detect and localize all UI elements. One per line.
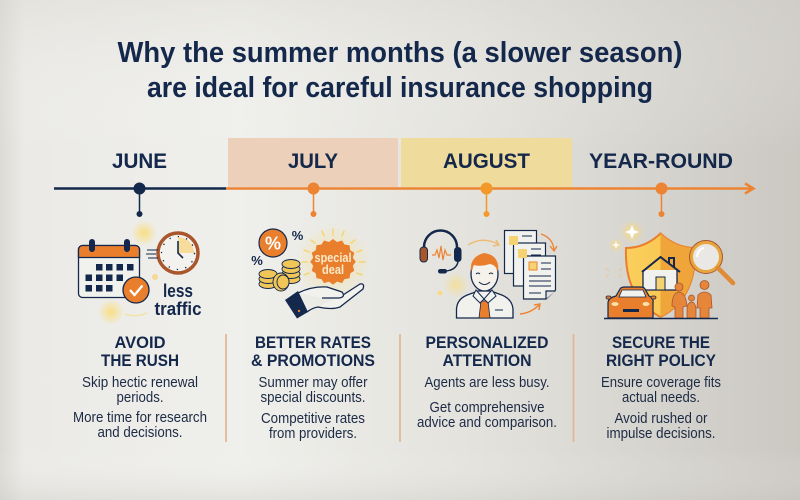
title: Why the summer months (a slower season) — [118, 37, 682, 69]
text column: better rates and promotions: Summer may offer — [258, 374, 368, 391]
icon: calendar, clock and less traffic: traffic — [154, 299, 202, 319]
text column: better rates and promotions: Competitive rates — [261, 410, 365, 427]
icon: calendar, clock and less traffic: less — [163, 281, 193, 301]
label: July: JULY — [288, 149, 338, 173]
text column: better rates and promotions: special discounts. — [260, 389, 366, 406]
text column: secure the right policy: actual needs. — [622, 389, 700, 406]
divider lines between columns — [226, 334, 574, 442]
text column: personalized attention — [417, 334, 557, 431]
band: July — [228, 138, 398, 187]
text column: avoid the rush — [73, 334, 207, 441]
text column: avoid the rush: and decisions. — [98, 424, 182, 441]
text column: better rates and promotions: BETTER RATES — [255, 334, 371, 352]
text column: secure the right policy: impulse decisions. — [606, 425, 716, 442]
band: August — [401, 138, 572, 187]
icon: special deal, coins and hand: % — [251, 253, 263, 268]
text column: better rates and promotions — [251, 334, 375, 442]
text column: better rates and promotions: from providers. — [269, 425, 357, 442]
marker: July — [308, 183, 319, 216]
label: Year-round: YEAR-ROUND — [589, 149, 733, 173]
title: are ideal for careful insurance shopping — [147, 72, 653, 104]
text column: avoid the rush: Skip hectic renewal — [82, 374, 198, 391]
label: June: JUNE — [112, 149, 167, 173]
icon: special deal, coins and hand: deal — [322, 262, 344, 277]
text column: personalized attention: Get comprehensive — [430, 399, 544, 416]
text column: secure the right policy: SECURE THE — [612, 334, 710, 352]
text column: secure the right policy: RIGHT POLICY — [606, 352, 716, 370]
text column: personalized attention: Agents are less busy. — [424, 374, 550, 391]
text column: personalized attention: advice and comparison. — [417, 414, 557, 431]
timeline — [54, 138, 754, 216]
text column: avoid the rush: THE RUSH — [101, 352, 179, 370]
text column: secure the right policy: Ensure coverage fits — [601, 374, 721, 391]
text column: avoid the rush: More time for research — [73, 409, 207, 426]
text column: personalized attention: PERSONALIZED — [426, 334, 549, 352]
icon: calendar, clock and less traffic — [78, 220, 202, 325]
text column: personalized attention: ATTENTION — [442, 352, 532, 370]
text column: better rates and promotions: & PROMOTIONS — [251, 352, 375, 370]
title — [118, 37, 682, 104]
label: August: AUGUST — [443, 149, 530, 173]
text column: avoid the rush: periods. — [116, 389, 164, 406]
timeline line: navy — [54, 187, 226, 190]
icon: special deal, coins and hand: % — [265, 234, 281, 254]
icon: special deal, coins and hand — [251, 224, 371, 318]
marker: August — [481, 183, 492, 216]
marker: June — [134, 183, 145, 216]
timeline arrow: orange — [226, 184, 754, 194]
icon: special deal, coins and hand: % — [292, 228, 304, 243]
icon: special deal, coins and hand: special — [314, 250, 352, 265]
text column: secure the right policy — [601, 334, 721, 442]
marker: Year-round — [656, 183, 667, 216]
icon: shield, house, car and family — [604, 220, 733, 318]
text column: secure the right policy: Avoid rushed or — [614, 410, 708, 427]
text column: avoid the rush: AVOID — [114, 334, 166, 352]
icon: agent, headset and documents — [420, 230, 557, 318]
